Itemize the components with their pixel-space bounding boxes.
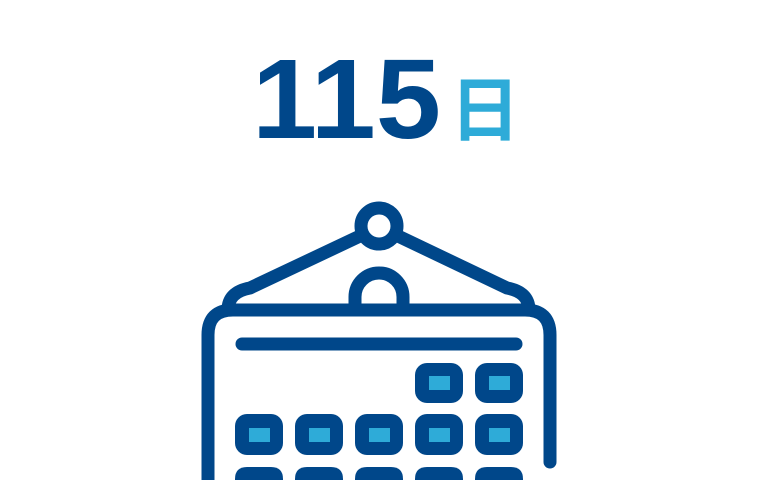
title: 115日: 日 xyxy=(450,72,520,150)
title: 115日 xyxy=(252,36,520,162)
cell highlights xyxy=(249,376,510,442)
hanging hook circle xyxy=(361,208,397,244)
hanging strings xyxy=(228,236,529,310)
frame xyxy=(208,310,550,480)
ring semicircle xyxy=(355,273,403,310)
icon: hanging calendar xyxy=(208,208,550,480)
header bar xyxy=(242,338,516,350)
calendar cells xyxy=(235,363,523,480)
title: 115日: 115 xyxy=(252,36,441,162)
